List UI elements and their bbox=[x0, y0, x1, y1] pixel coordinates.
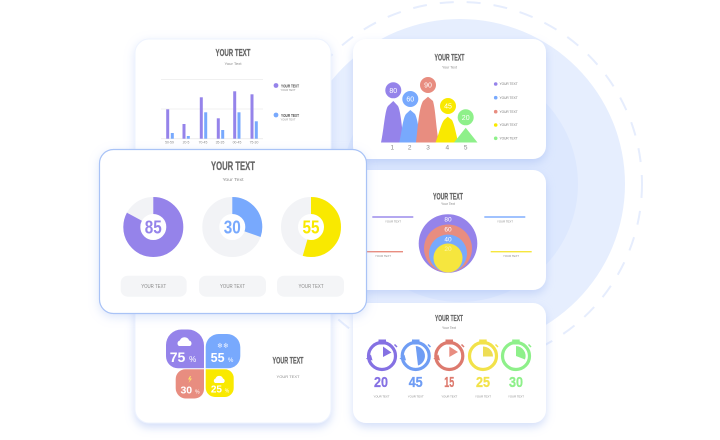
bar chart: 75-30 bbox=[250, 140, 258, 144]
stopwatch: 15 bbox=[435, 340, 464, 398]
mountain chart: 90 bbox=[424, 83, 432, 90]
tile: 75 percent: 75 % bbox=[170, 349, 196, 365]
button: first label: YOUR TEXT bbox=[141, 284, 166, 290]
tile: 30 percent: 30 % bbox=[180, 384, 200, 396]
stopwatch: 30: 30 bbox=[509, 375, 523, 391]
legend: bar chart: YOUR TEXT bbox=[281, 113, 299, 118]
callout lines: YOUR TEXT bbox=[385, 220, 401, 224]
mountain chart: 2 bbox=[408, 144, 412, 152]
tile: 55 percent: ❄❄ bbox=[217, 342, 229, 350]
legend: bar chart: YOUR TEXT bbox=[280, 118, 296, 122]
bar chart: 35-35 bbox=[216, 140, 224, 144]
bar chart bbox=[161, 80, 263, 144]
legend: mountain chart: YOUR TEXT bbox=[500, 82, 518, 86]
stopwatch: 45: YOUR TEXT bbox=[408, 394, 424, 398]
tile: 25 percent: 25 % bbox=[211, 384, 230, 396]
subheading: donuts: Your Text bbox=[222, 177, 245, 182]
heading: donuts: YOUR TEXT bbox=[211, 159, 255, 173]
heading: nested circles: YOUR TEXT bbox=[433, 192, 463, 202]
panel: bar chart card bbox=[135, 39, 331, 169]
stopwatch: 25: YOUR TEXT bbox=[475, 394, 491, 398]
bar chart: 50-59 bbox=[165, 140, 174, 144]
nested circle chart: 20 bbox=[444, 246, 452, 253]
nested circle chart: 60 bbox=[444, 226, 452, 234]
callout lines: YOUR TEXT bbox=[497, 220, 513, 224]
donut: 85: 85 bbox=[145, 218, 162, 238]
bar chart: 70-45 bbox=[199, 140, 207, 144]
tile: 55 percent: 55 % bbox=[211, 351, 234, 365]
stopwatch: 20 bbox=[368, 340, 397, 398]
button: first label bbox=[121, 276, 187, 297]
stopwatch: 20: YOUR TEXT bbox=[374, 394, 390, 398]
subheading: tiles: YOUR TEXT bbox=[276, 375, 300, 379]
bar chart: 00-45 bbox=[233, 140, 241, 144]
mountain chart: 60 bbox=[406, 97, 414, 104]
stopwatch: 15: YOUR TEXT bbox=[441, 394, 458, 398]
mountain chart: 80 bbox=[389, 88, 397, 95]
heading: stopwatches: YOUR TEXT bbox=[435, 313, 463, 323]
stopwatch: 20: 20 bbox=[374, 375, 388, 391]
tile: 75 percent bbox=[166, 330, 204, 368]
stopwatch: 30: YOUR TEXT bbox=[508, 394, 524, 398]
subheading: mountain chart: Your Text bbox=[442, 66, 457, 70]
stopwatch: 45: 45 bbox=[409, 375, 423, 391]
button: second label: YOUR TEXT bbox=[220, 284, 245, 290]
callout lines bbox=[365, 216, 532, 258]
donut: 30 bbox=[211, 206, 254, 248]
donut: 85 bbox=[132, 206, 175, 248]
heading: bar chart: YOUR TEXT bbox=[216, 48, 250, 59]
donut: 30: 30 bbox=[224, 218, 241, 238]
subheading: stopwatches: Your Text bbox=[442, 326, 456, 330]
panel: donut charts card bbox=[100, 150, 366, 314]
legend: mountain chart: YOUR TEXT bbox=[500, 136, 518, 140]
mountain chart: 20 bbox=[462, 115, 470, 122]
subheading: bar chart: Your Text bbox=[224, 62, 242, 66]
panel: stopwatches card bbox=[353, 303, 546, 423]
donut: 55: 55 bbox=[302, 218, 320, 238]
nested circle chart bbox=[419, 214, 477, 273]
mountain chart: 5 bbox=[464, 144, 468, 152]
callout lines: YOUR TEXT bbox=[375, 254, 391, 258]
stopwatch: 45 bbox=[401, 340, 430, 398]
tile: 30 percent bbox=[176, 369, 204, 398]
nested circle chart: 80 bbox=[444, 216, 452, 224]
heading: mountain chart: YOUR TEXT bbox=[434, 52, 465, 62]
heading: tiles: YOUR TEXT bbox=[272, 356, 304, 366]
nested circle chart: 40 bbox=[444, 236, 452, 243]
bar chart: 20-5 bbox=[183, 140, 190, 144]
mountain chart: 45 bbox=[444, 104, 452, 111]
mountain chart: 1 bbox=[390, 144, 394, 152]
tile: 55 percent bbox=[206, 334, 240, 368]
legend: mountain chart bbox=[494, 82, 518, 140]
tile: 25 percent bbox=[206, 369, 234, 397]
subheading: nested circles: Your Text bbox=[441, 202, 455, 206]
donut: 55 bbox=[290, 206, 332, 248]
legend: mountain chart: YOUR TEXT bbox=[500, 96, 518, 100]
legend: mountain chart: YOUR TEXT bbox=[500, 123, 518, 127]
panel: mountain chart card bbox=[353, 39, 546, 159]
mountain chart: 4 bbox=[445, 144, 449, 152]
legend: mountain chart: YOUR TEXT bbox=[500, 110, 518, 114]
stopwatch: 15: 15 bbox=[444, 375, 454, 391]
panel: quadrant tiles card bbox=[135, 290, 331, 423]
button: third label bbox=[277, 276, 344, 297]
stopwatch: 25: 25 bbox=[476, 375, 490, 391]
callout lines: YOUR TEXT bbox=[503, 254, 519, 258]
button: second label bbox=[199, 276, 266, 297]
background circles bbox=[278, 2, 642, 366]
button: third label: YOUR TEXT bbox=[298, 284, 324, 290]
legend: bar chart: YOUR TEXT bbox=[280, 88, 296, 92]
mountain chart: 3 bbox=[426, 144, 430, 152]
mountain chart bbox=[381, 77, 478, 152]
legend: bar chart bbox=[274, 83, 299, 122]
stopwatch: 25 bbox=[470, 340, 498, 398]
stopwatch: 30 bbox=[502, 340, 531, 398]
panel: nested circles card bbox=[353, 170, 546, 290]
legend: bar chart: YOUR TEXT bbox=[281, 83, 299, 88]
